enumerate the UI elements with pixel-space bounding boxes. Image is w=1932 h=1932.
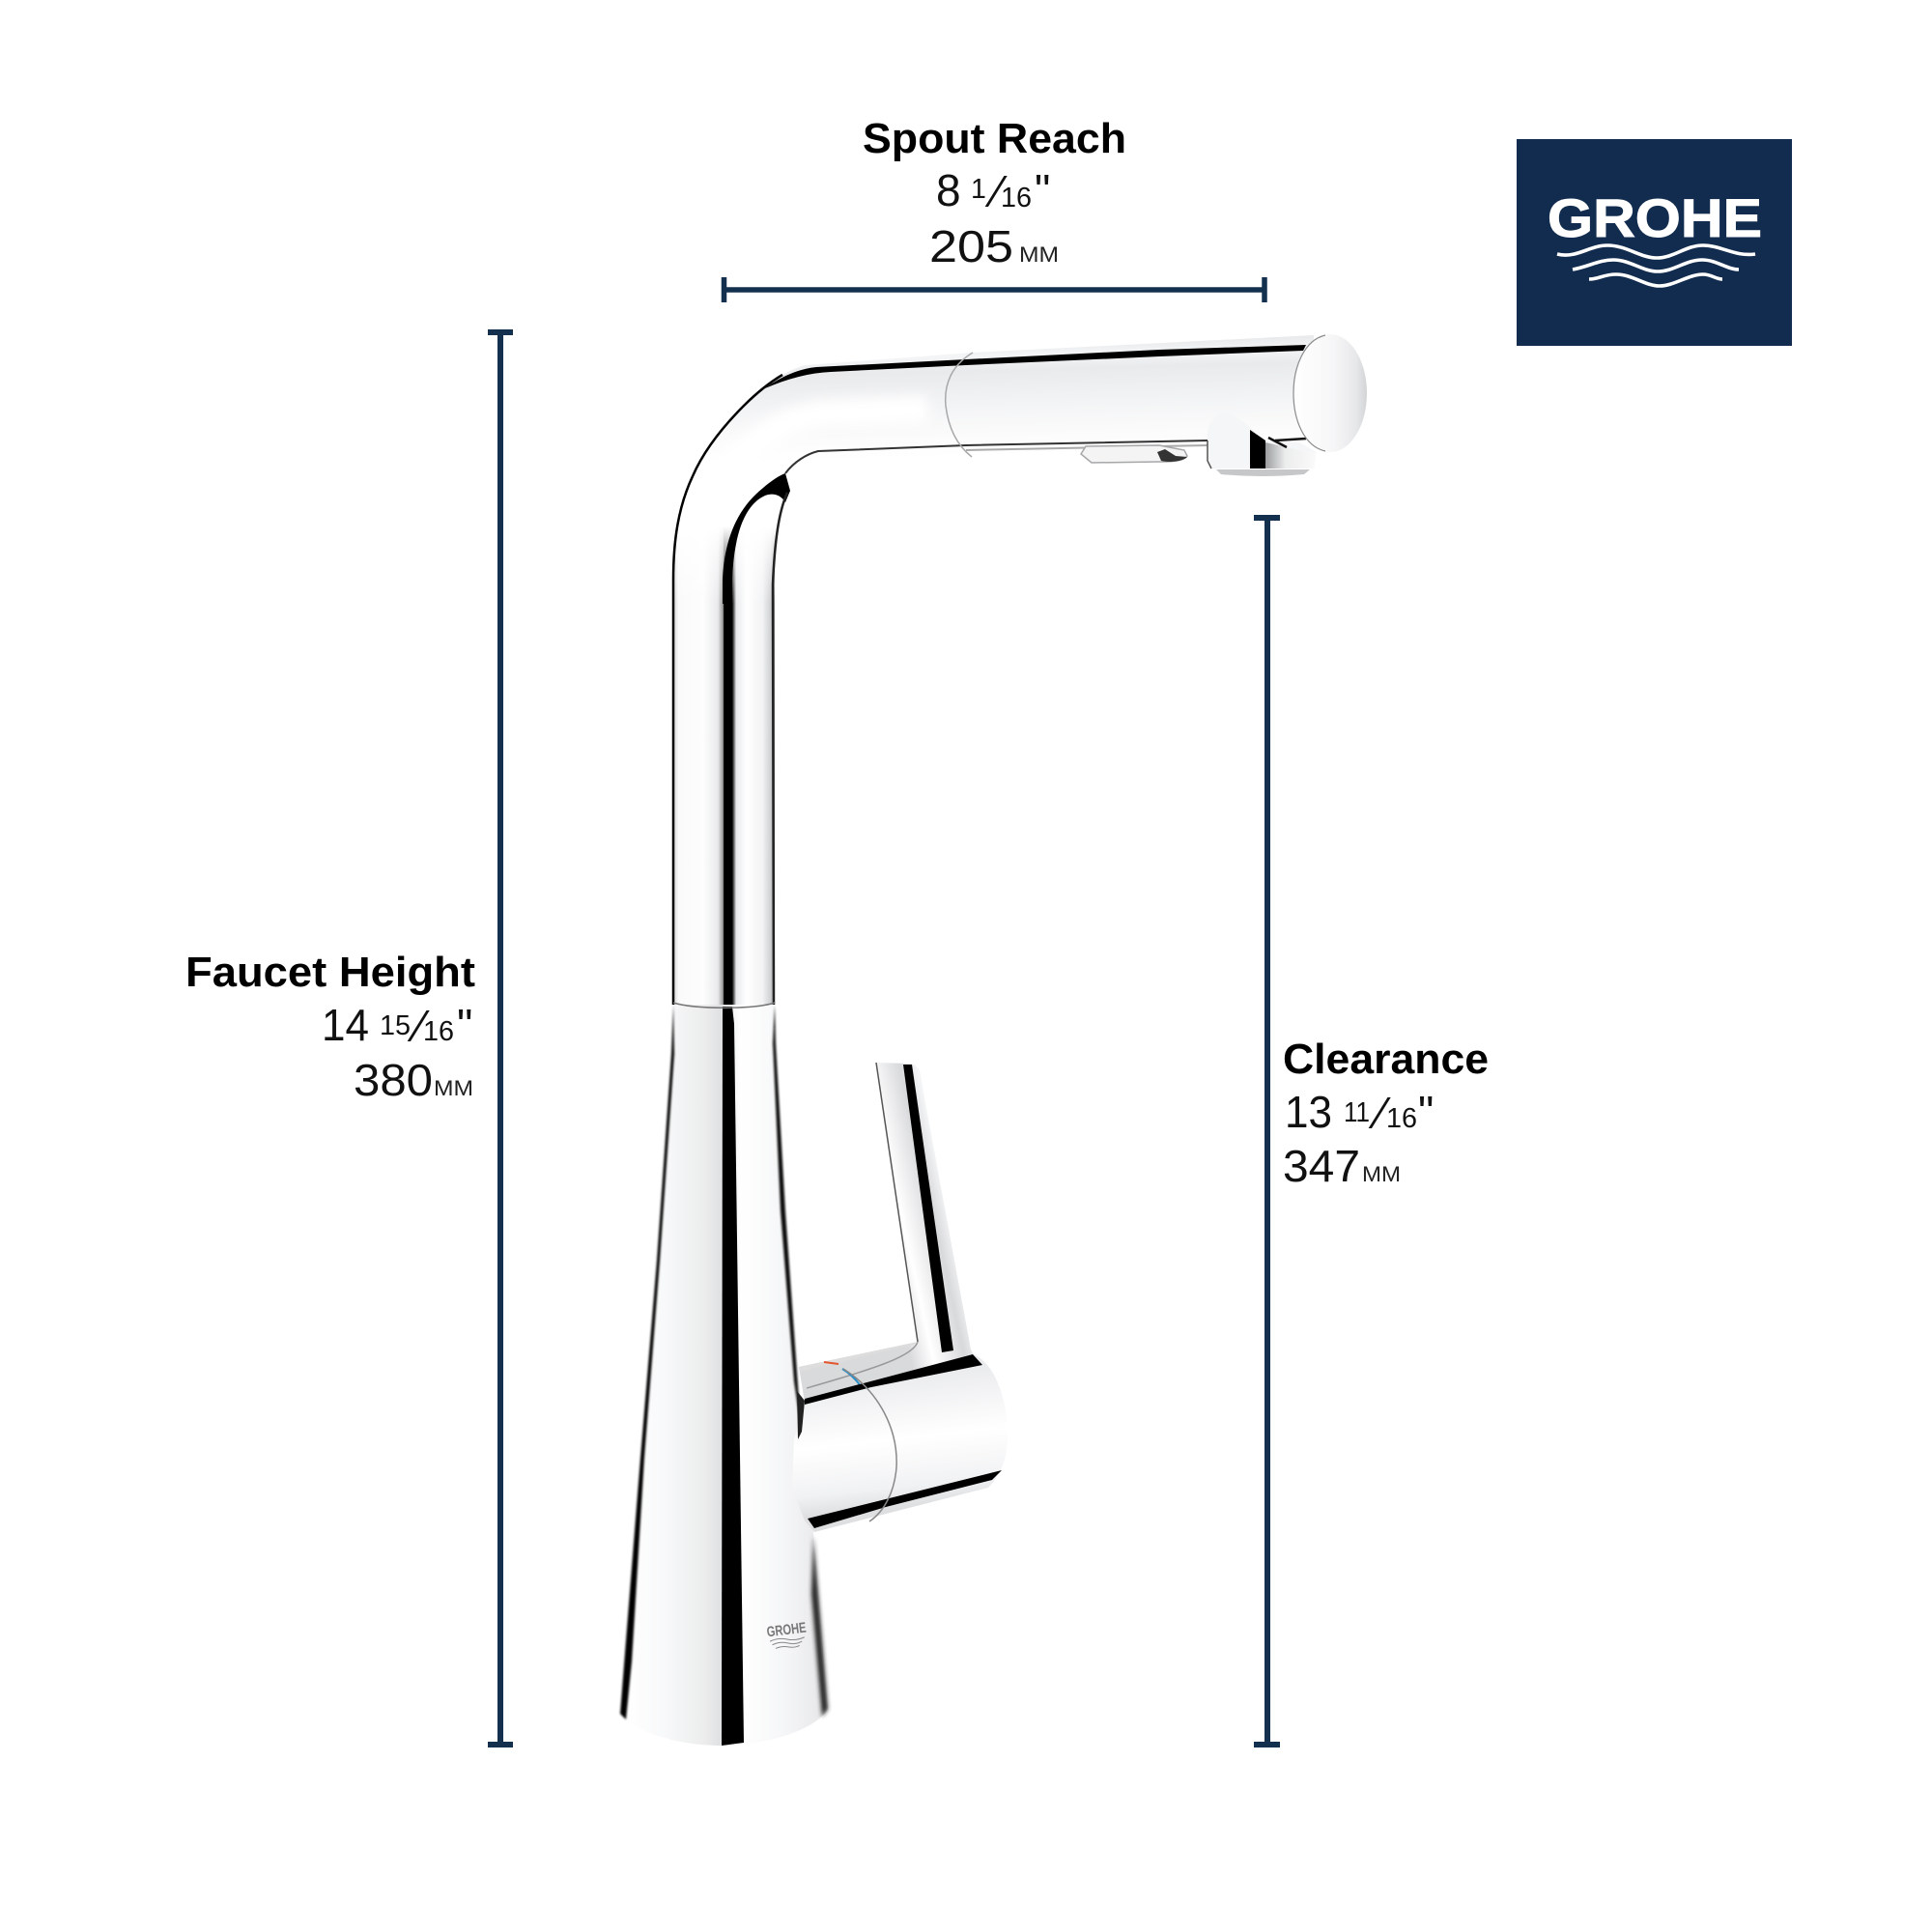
right edge reflection: [811, 1536, 828, 1717]
outer edge of the bend: [673, 375, 782, 1005]
hot indicator: [824, 1362, 838, 1364]
infographic canvas: [188, 122, 1792, 1747]
spout reach label: Spout Reach: [863, 115, 1126, 162]
engraved brand on body: [766, 1620, 809, 1650]
spout reach label: [863, 115, 1126, 271]
clearance label: ⁄: [1368, 1088, 1391, 1138]
logo wordmark: GROHE: [1548, 187, 1762, 248]
faucet height label: MM: [434, 1076, 473, 1100]
slide button: [1081, 445, 1187, 463]
logo waves: [1557, 245, 1755, 286]
faucet height label: 380: [354, 1055, 433, 1105]
spray head: [1208, 412, 1317, 476]
spout reach arrow: [724, 277, 1264, 302]
engraved brand on body: GROHE: [766, 1620, 808, 1640]
clearance label: 13: [1285, 1087, 1332, 1137]
pull-out joint ring: [946, 353, 973, 457]
spout reach label: MM: [1019, 242, 1059, 267]
faucet height label: 14: [322, 1000, 369, 1050]
spout reach label: 1: [971, 174, 986, 205]
left edge reflection: [620, 1005, 674, 1719]
faucet illustration: [620, 334, 1367, 1746]
spout reach label: 205: [929, 221, 1013, 271]
mixer body cylinder: [792, 1354, 1008, 1532]
clearance label: MM: [1362, 1162, 1401, 1186]
lower conical body: [620, 1003, 828, 1746]
inner edge of the column: [773, 493, 787, 1005]
central black stripe: [722, 1007, 744, 1746]
clearance label: ": [1418, 1087, 1434, 1137]
faucet height label: 15: [380, 1010, 411, 1041]
dark stripe along top of the spout: [765, 345, 1306, 388]
clearance label: 16: [1386, 1103, 1417, 1134]
faucet height label: 16: [423, 1016, 454, 1047]
clearance label: Clearance: [1283, 1036, 1489, 1083]
mixer lever: [799, 1063, 978, 1403]
lower edge lines of the spout: [785, 440, 1208, 473]
clearance label: 11: [1344, 1097, 1370, 1128]
GROHE logo: [1517, 139, 1792, 346]
top black reflection: [805, 1354, 982, 1405]
faucet height label: [185, 949, 475, 1105]
clearance arrow: [1254, 518, 1280, 1745]
clearance dimension: [1254, 518, 1489, 1745]
cold indicator: [842, 1369, 863, 1389]
faucet height label: Faucet Height: [185, 949, 475, 996]
faucet height label: ": [457, 1000, 472, 1050]
faucet height dimension: [185, 332, 513, 1745]
bottom black reflection: [808, 1470, 1002, 1528]
black reflection on the bend: [723, 473, 790, 604]
clearance label: 347: [1283, 1141, 1360, 1191]
spout reach label: ": [1035, 165, 1050, 215]
dark wedge between body and cylinder: [797, 1391, 805, 1439]
faucet height label: ⁄: [407, 1001, 430, 1051]
spout reach label: 8: [936, 165, 961, 215]
spout end cap: [1293, 334, 1367, 452]
clearance label: [1283, 1036, 1489, 1191]
spout reach label: ⁄: [984, 166, 1008, 216]
handle joint ring: [843, 1369, 896, 1521]
spout reach label: 16: [1001, 183, 1032, 213]
upper tube: column, bend and pull-out spout: [673, 335, 1314, 1007]
faucet height arrow: [488, 332, 513, 1745]
body joint ring: [673, 1003, 775, 1008]
spout reach dimension: [724, 115, 1264, 302]
nozzle: [1216, 469, 1310, 476]
